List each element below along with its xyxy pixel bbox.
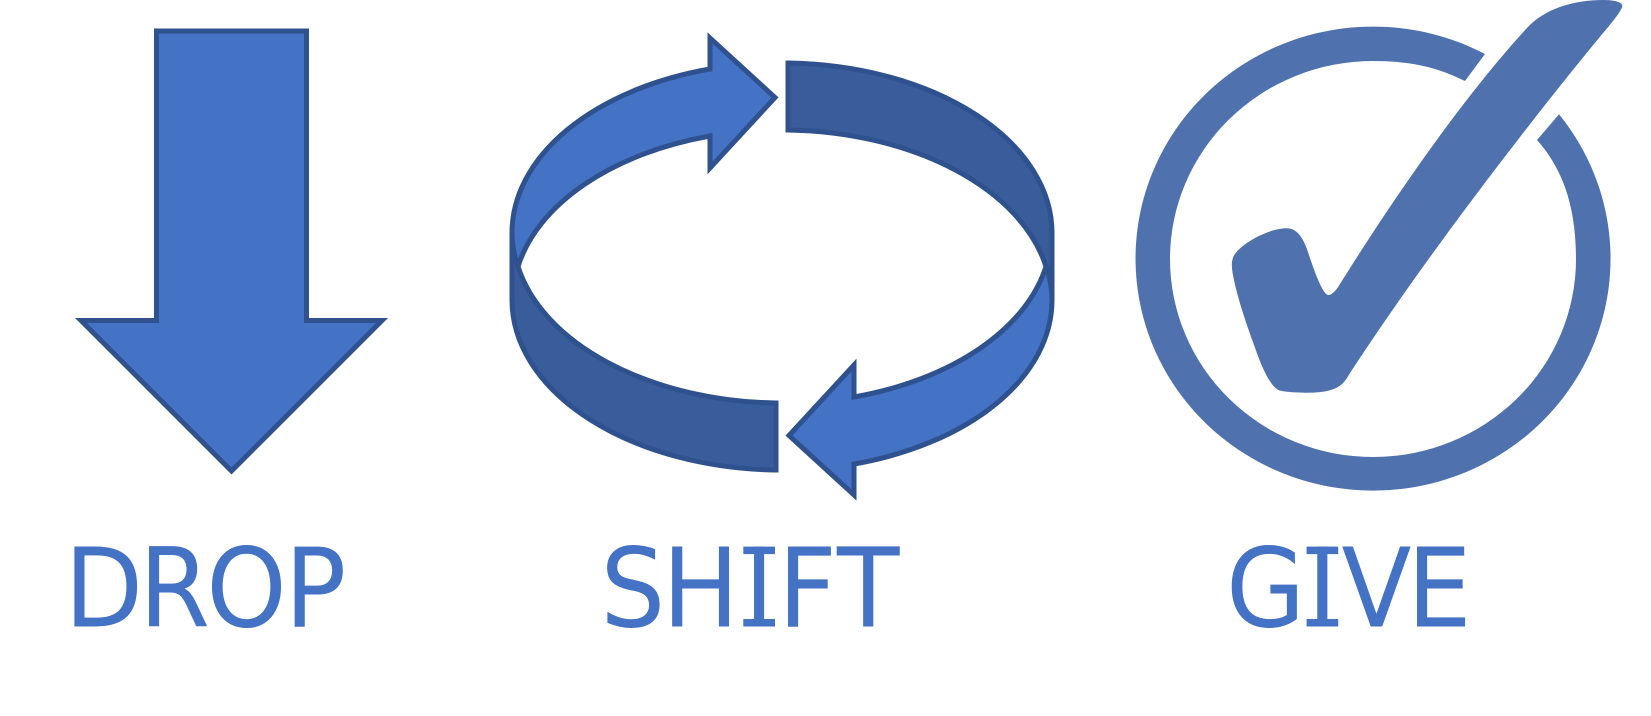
upper-right dark band [788, 63, 1052, 300]
icon: cycle arrows [512, 38, 1052, 495]
icon: check mark in circle [1136, 0, 1622, 491]
check mark [1232, 0, 1622, 393]
label: SHIFT: SHIFT [600, 525, 901, 653]
label: DROP: DROP [64, 525, 346, 653]
lower arrow [789, 266, 1052, 495]
upper arrow [512, 38, 775, 266]
label: GIVE: GIVE [1226, 525, 1472, 653]
icon: down arrow [81, 31, 382, 471]
ring [1136, 27, 1611, 491]
lower-left dark band [512, 233, 776, 470]
